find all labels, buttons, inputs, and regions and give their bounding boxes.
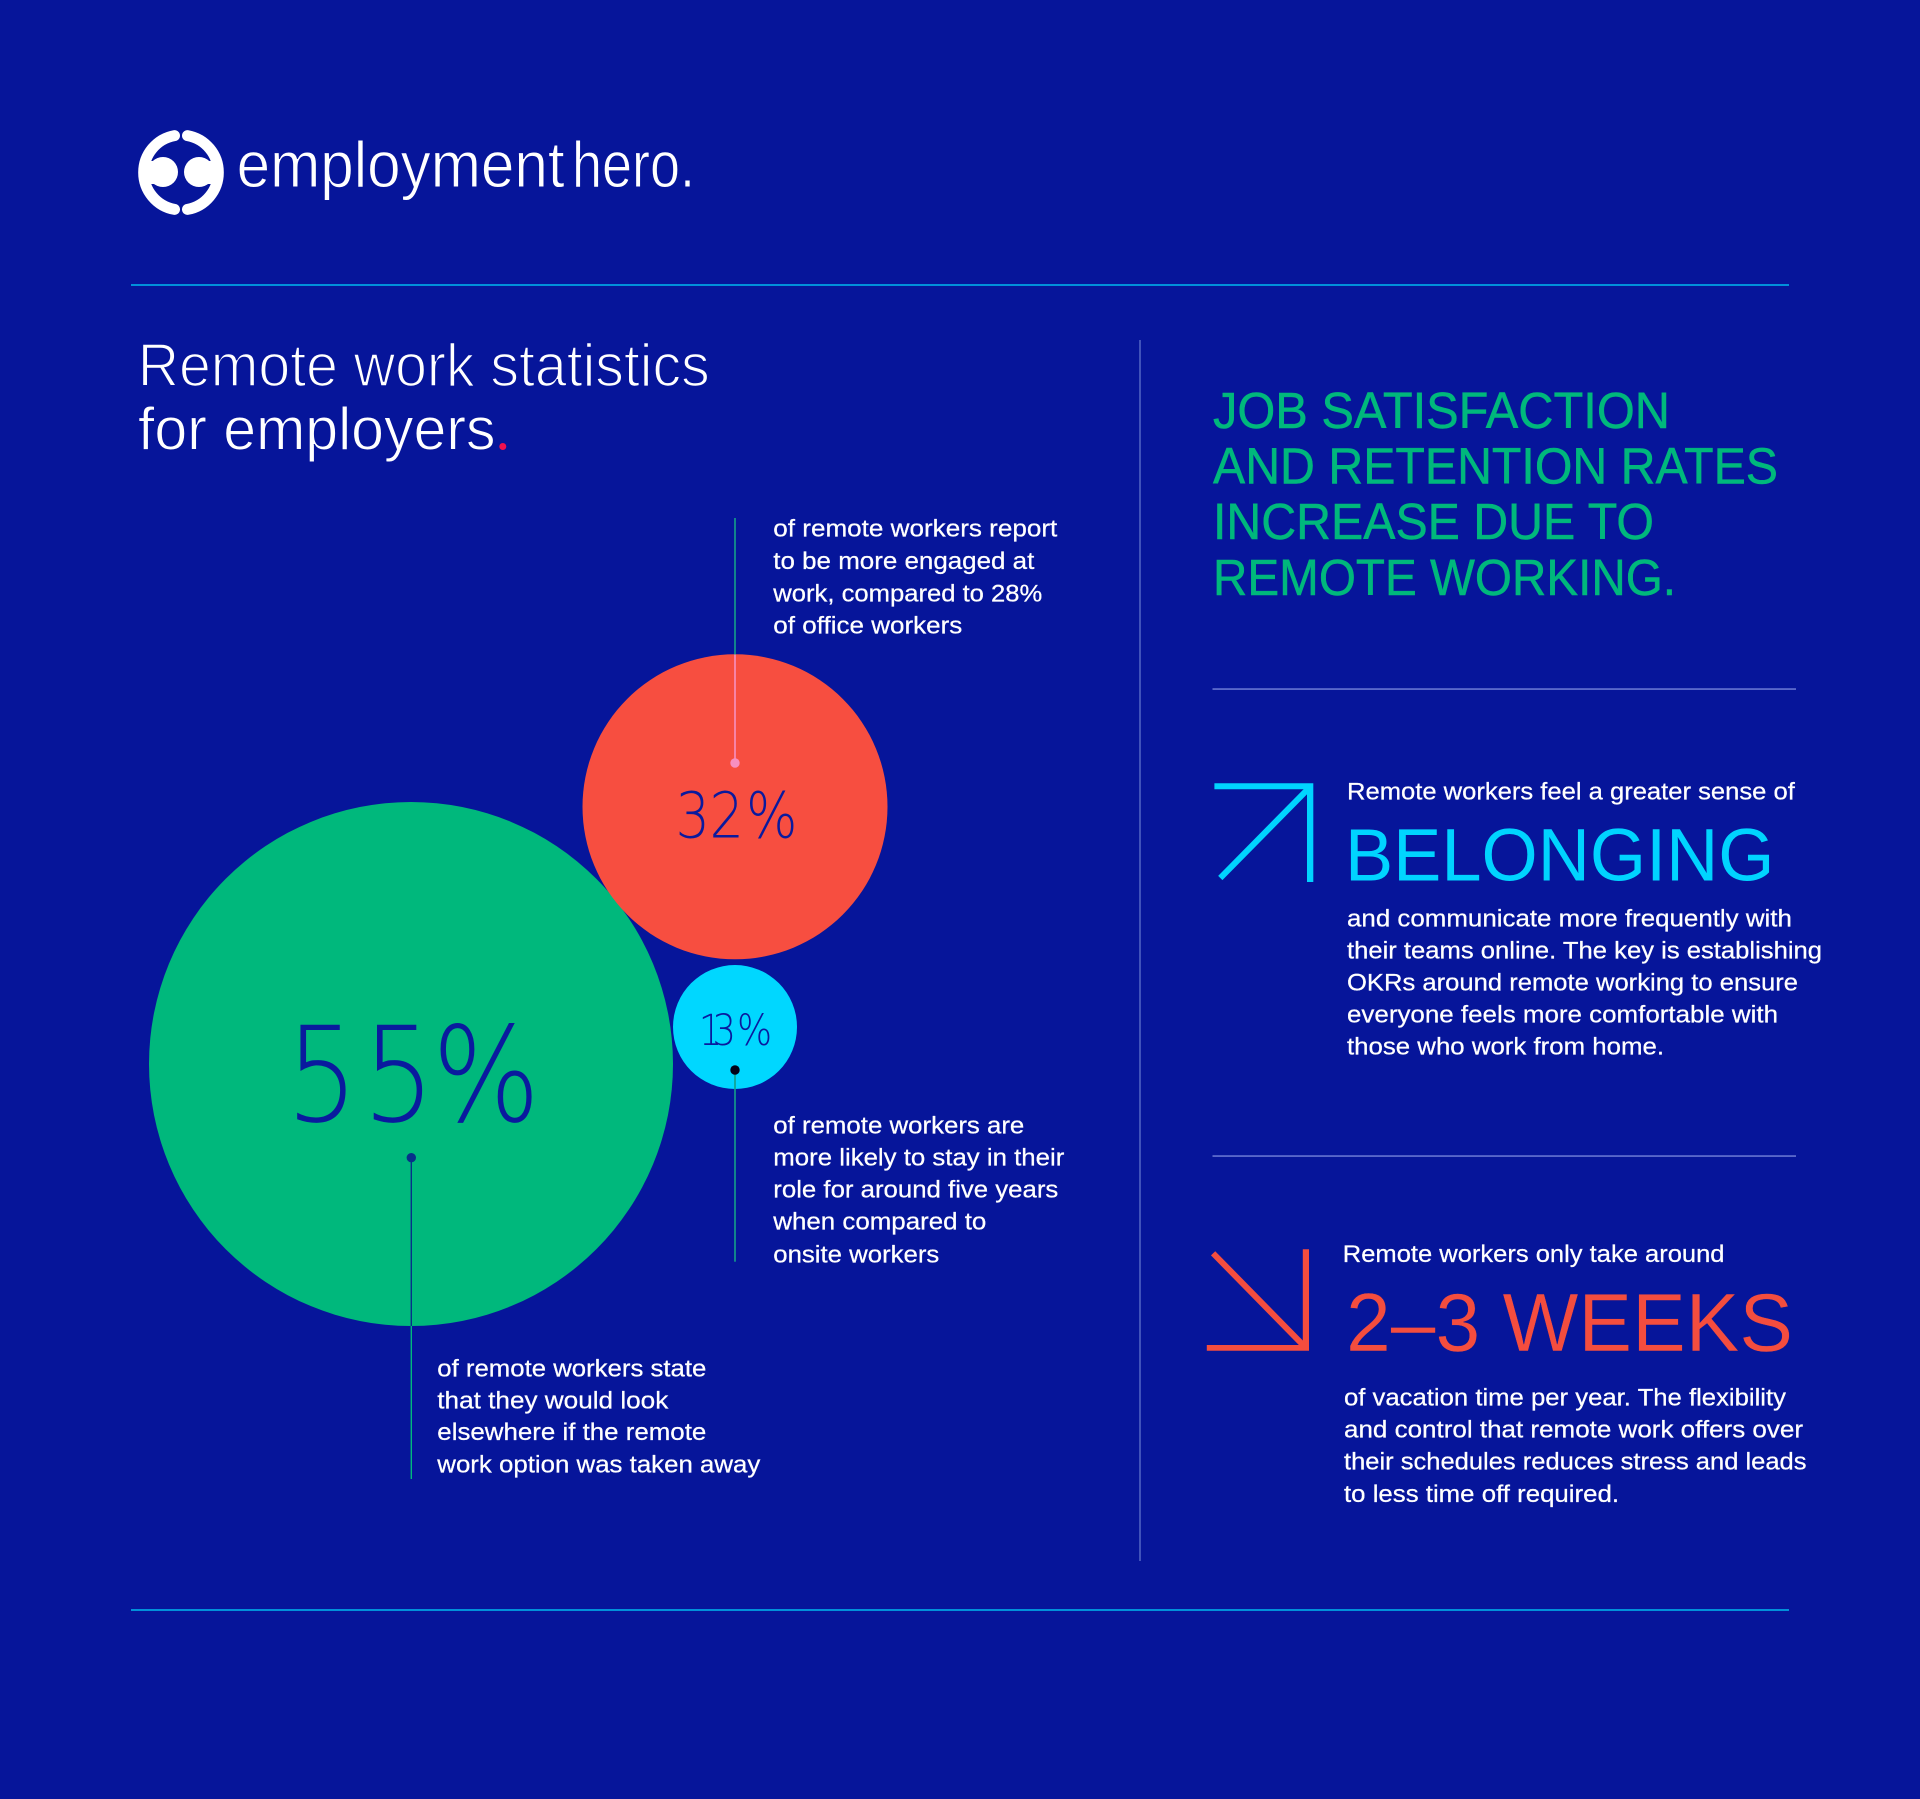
text block: 13% description	[772, 1112, 1064, 1268]
text block: 55% description: that they would look	[437, 1387, 669, 1414]
body text: vacation time: and control that remote work offers over	[1344, 1416, 1803, 1444]
body text: belonging: and communicate more frequently with	[1347, 905, 1792, 932]
text block: 13% description: of remote workers are	[773, 1112, 1024, 1139]
text block: 55% description: elsewhere if the remote	[437, 1419, 706, 1446]
heading: job satisfaction and retention rates	[1213, 382, 1778, 606]
big word: BELONGING: BELONGING	[1345, 814, 1774, 897]
text block: 32% description: to be more engaged at	[773, 548, 1035, 575]
value: 55%: 55%	[286, 1000, 540, 1153]
title: remote work statistics for employers: for employers	[138, 396, 496, 462]
body text: vacation time: of vacation time per year. The flexibility	[1344, 1384, 1786, 1412]
value: 32%: 32%	[676, 778, 798, 852]
body text: belonging: their teams online. The key is establishing	[1347, 938, 1822, 965]
logo: employment hero	[144, 128, 695, 209]
text block: 13% description: when compared to	[772, 1209, 986, 1236]
heading: job satisfaction and retention rates: AND RETENTION RATES	[1213, 438, 1778, 494]
heading: job satisfaction and retention rates: INCREASE DUE TO	[1213, 493, 1654, 550]
panel: belonging: Remote workers feel a greater sense of	[1347, 779, 1795, 806]
body text: vacation time	[1344, 1384, 1806, 1508]
text block: 32% description	[772, 516, 1058, 639]
logo wordmark: hero.	[572, 128, 695, 201]
chart: cyan circle 13%	[673, 965, 797, 1262]
text block: 55% description: work option was taken away	[436, 1451, 760, 1478]
icon: logo mark	[144, 136, 218, 209]
text block: 13% description: more likely to stay in their	[773, 1145, 1064, 1172]
body text: vacation time: to less time off required.	[1344, 1481, 1619, 1508]
text block: 32% description: work, compared to 28%	[772, 580, 1042, 607]
text block: 55% description: of remote workers state	[437, 1355, 706, 1382]
heading: job satisfaction and retention rates: JOB SATISFACTION	[1213, 382, 1670, 439]
title: remote work statistics for employers: Remote work statistics	[138, 332, 710, 399]
panel: 2-3 weeks	[1343, 1241, 1806, 1508]
body text: belonging	[1347, 905, 1822, 1061]
chart: green circle 55%	[149, 802, 673, 1479]
body text: belonging: those who work from home.	[1347, 1034, 1664, 1061]
text block: 13% description: role for around five years	[773, 1177, 1058, 1204]
panel: belonging	[1345, 779, 1822, 1061]
big figure: 2–3 WEEKS: 2–3 WEEKS	[1346, 1276, 1793, 1369]
text block: 13% description: onsite workers	[773, 1241, 939, 1268]
icon: arrow down right	[1207, 1249, 1309, 1351]
body text: belonging: everyone feels more comfortable with	[1347, 1002, 1778, 1029]
chart: red circle 32%	[582, 518, 888, 959]
icon: arrow up right	[1214, 783, 1313, 882]
heading: job satisfaction and retention rates: REMOTE WORKING.	[1213, 549, 1676, 606]
body text: belonging: OKRs around remote working to ensure	[1347, 970, 1798, 997]
text block: 55% description	[436, 1355, 760, 1478]
body text: vacation time: their schedules reduces stress and leads	[1344, 1448, 1806, 1476]
text block: 32% description: of office workers	[773, 612, 962, 639]
value: 13%: 13%	[699, 1006, 772, 1056]
logo wordmark: employment	[237, 128, 565, 201]
title: remote work statistics for employers	[138, 332, 710, 462]
text block: 32% description: of remote workers report	[773, 516, 1058, 543]
panel: 2-3 weeks: Remote workers only take around	[1343, 1241, 1725, 1268]
